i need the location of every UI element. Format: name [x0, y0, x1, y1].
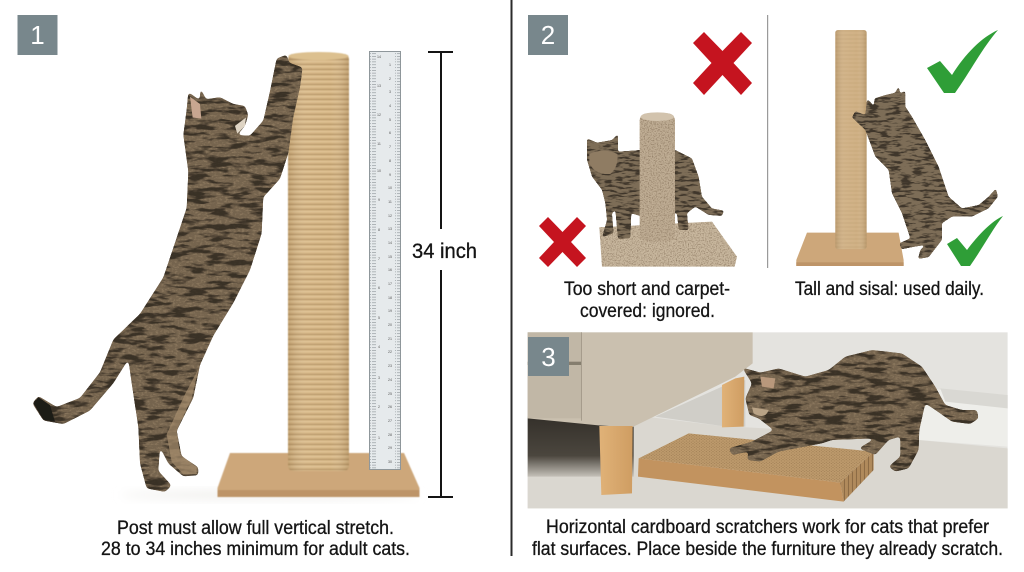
ruler: 21 [388, 337, 392, 341]
ruler: 14 [377, 55, 381, 59]
ruler: 24 [388, 378, 392, 382]
badge 3 [528, 337, 569, 376]
ruler: 19 [388, 309, 392, 313]
divider between left and right columns [510, 0, 512, 556]
small green check [947, 216, 1003, 266]
sisal scene: tall post and cat [796, 30, 998, 266]
ruler: 15 [388, 255, 392, 259]
ruler: 11 [377, 142, 381, 146]
ruler: 7 [389, 145, 391, 149]
ruler: 10 [377, 169, 381, 173]
ruler: 3 [378, 376, 380, 380]
ruler: 6 [378, 286, 380, 290]
ruler: 7 [378, 257, 380, 261]
badge 2 [528, 15, 568, 55]
ruler: 5 [389, 118, 391, 122]
ruler: 27 [388, 419, 392, 423]
ruler: 8 [389, 159, 391, 163]
ruler: 5 [378, 316, 380, 320]
big red cross [693, 32, 752, 95]
ruler: 3 [389, 90, 391, 94]
caption: tall and sisal: Tall and sisal: used daily. [795, 279, 984, 300]
photo: sofa, cardboard scratcher and cat [528, 332, 1008, 508]
sisal post with base [218, 52, 420, 497]
ruler: 29 [388, 446, 392, 450]
ruler: 26 [388, 405, 392, 409]
ruler: 4 [389, 104, 391, 108]
cat stretching up the post [32, 55, 303, 492]
badge 1 [18, 15, 58, 55]
height dimension line [428, 52, 453, 497]
ruler: 9 [378, 198, 380, 202]
panel 2: post comparison [528, 15, 1003, 322]
divider inside panel 2 [767, 15, 768, 268]
ruler: 8 [378, 228, 380, 232]
ruler: 14 [388, 241, 392, 245]
ruler: 23 [388, 364, 392, 368]
ruler: 9 [389, 173, 391, 177]
ruler: 16 [388, 268, 392, 272]
big green check [927, 30, 998, 93]
caption: too short: Too short and carpet- [564, 279, 730, 300]
ruler: 13 [388, 227, 392, 231]
ruler: 30 [388, 460, 392, 464]
small red cross [539, 217, 586, 267]
panel 1: vertical stretch [18, 15, 477, 560]
ruler: 1 [378, 436, 380, 440]
caption 3: Horizontal cardboard scratchers work for cats that prefer [546, 517, 990, 538]
ruler: 28 [388, 433, 392, 437]
carpet scene: short post and cat [587, 112, 737, 267]
ruler: 2 [389, 77, 391, 81]
ruler: 1 [389, 63, 391, 67]
panel 3: horizontal scratcher [528, 332, 1008, 560]
label: 34 inch: 34 inch [412, 240, 477, 263]
ruler: 25 [388, 392, 392, 396]
caption 1: Post must allow full vertical stretch. [117, 518, 394, 539]
ruler: 12 [388, 214, 392, 218]
floor shadow [120, 491, 420, 499]
ruler: 4 [378, 345, 380, 349]
ruler: 10 [388, 186, 392, 190]
badge 1: 1 [30, 20, 45, 50]
ruler: 20 [388, 323, 392, 327]
caption: too short: covered: ignored. [580, 301, 715, 322]
badge 3: 3 [541, 342, 556, 372]
caption 1: 28 to 34 inches minimum for adult cats. [101, 539, 410, 560]
ruler: 2 [378, 405, 380, 409]
ruler: 22 [388, 350, 392, 354]
ruler: 18 [388, 296, 392, 300]
ruler: 6 [389, 131, 391, 135]
ruler: 13 [377, 84, 381, 88]
ruler: 17 [388, 282, 392, 286]
badge 2: 2 [541, 20, 555, 50]
ruler: 12 [377, 113, 381, 117]
ruler [370, 52, 400, 470]
ruler: 11 [388, 200, 392, 204]
